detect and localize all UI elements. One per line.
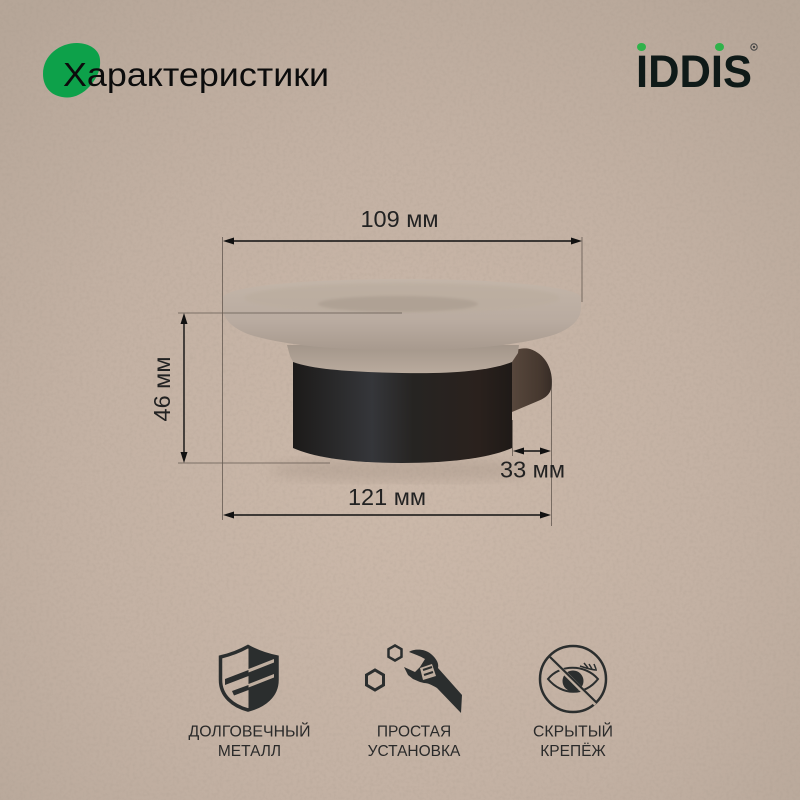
glass dish xyxy=(223,279,581,350)
frosted neck xyxy=(287,345,519,373)
dimension: 33 мм: 33 мм xyxy=(500,456,565,482)
heading: Характеристики with green blob: Характеристики xyxy=(63,56,329,93)
dimension: 121 мм xyxy=(223,484,551,518)
dimension: 121 мм: 121 мм xyxy=(348,484,426,510)
label: ПРОСТАЯ xyxy=(377,724,451,740)
heading: Характеристики with green blob xyxy=(43,43,329,98)
dimension: 46 мм: 46 мм xyxy=(149,357,175,421)
label: СКРЫТЫЙ xyxy=(533,722,613,740)
dimension: 109 мм xyxy=(223,206,582,244)
dimension: 109 мм: 109 мм xyxy=(360,206,439,232)
icon: nuts xyxy=(388,646,402,660)
label: ДОЛГОВЕЧНЫЙ xyxy=(188,722,310,740)
feature: durable metal xyxy=(188,645,310,760)
icon: shield xyxy=(220,645,278,711)
dimension guide lines xyxy=(178,237,582,526)
dimension: 46 мм xyxy=(149,313,188,463)
feature: durable metal: МЕТАЛЛ xyxy=(218,743,281,760)
icon: crossed eye xyxy=(540,646,606,712)
wall mount xyxy=(512,348,552,412)
feature: easy installation: УСТАНОВКА xyxy=(368,743,461,760)
black cylinder xyxy=(293,360,512,463)
wall shadow xyxy=(270,458,530,482)
logo: IDDIS: IDDIS xyxy=(636,46,752,97)
feature: hidden mount: КРЕПЁЖ xyxy=(540,743,606,760)
icon: wrench xyxy=(404,650,462,713)
feature: hidden mount xyxy=(533,646,613,760)
product: soap dish xyxy=(223,279,581,482)
feature: easy installation xyxy=(366,646,462,760)
icon: green blob xyxy=(43,43,100,98)
